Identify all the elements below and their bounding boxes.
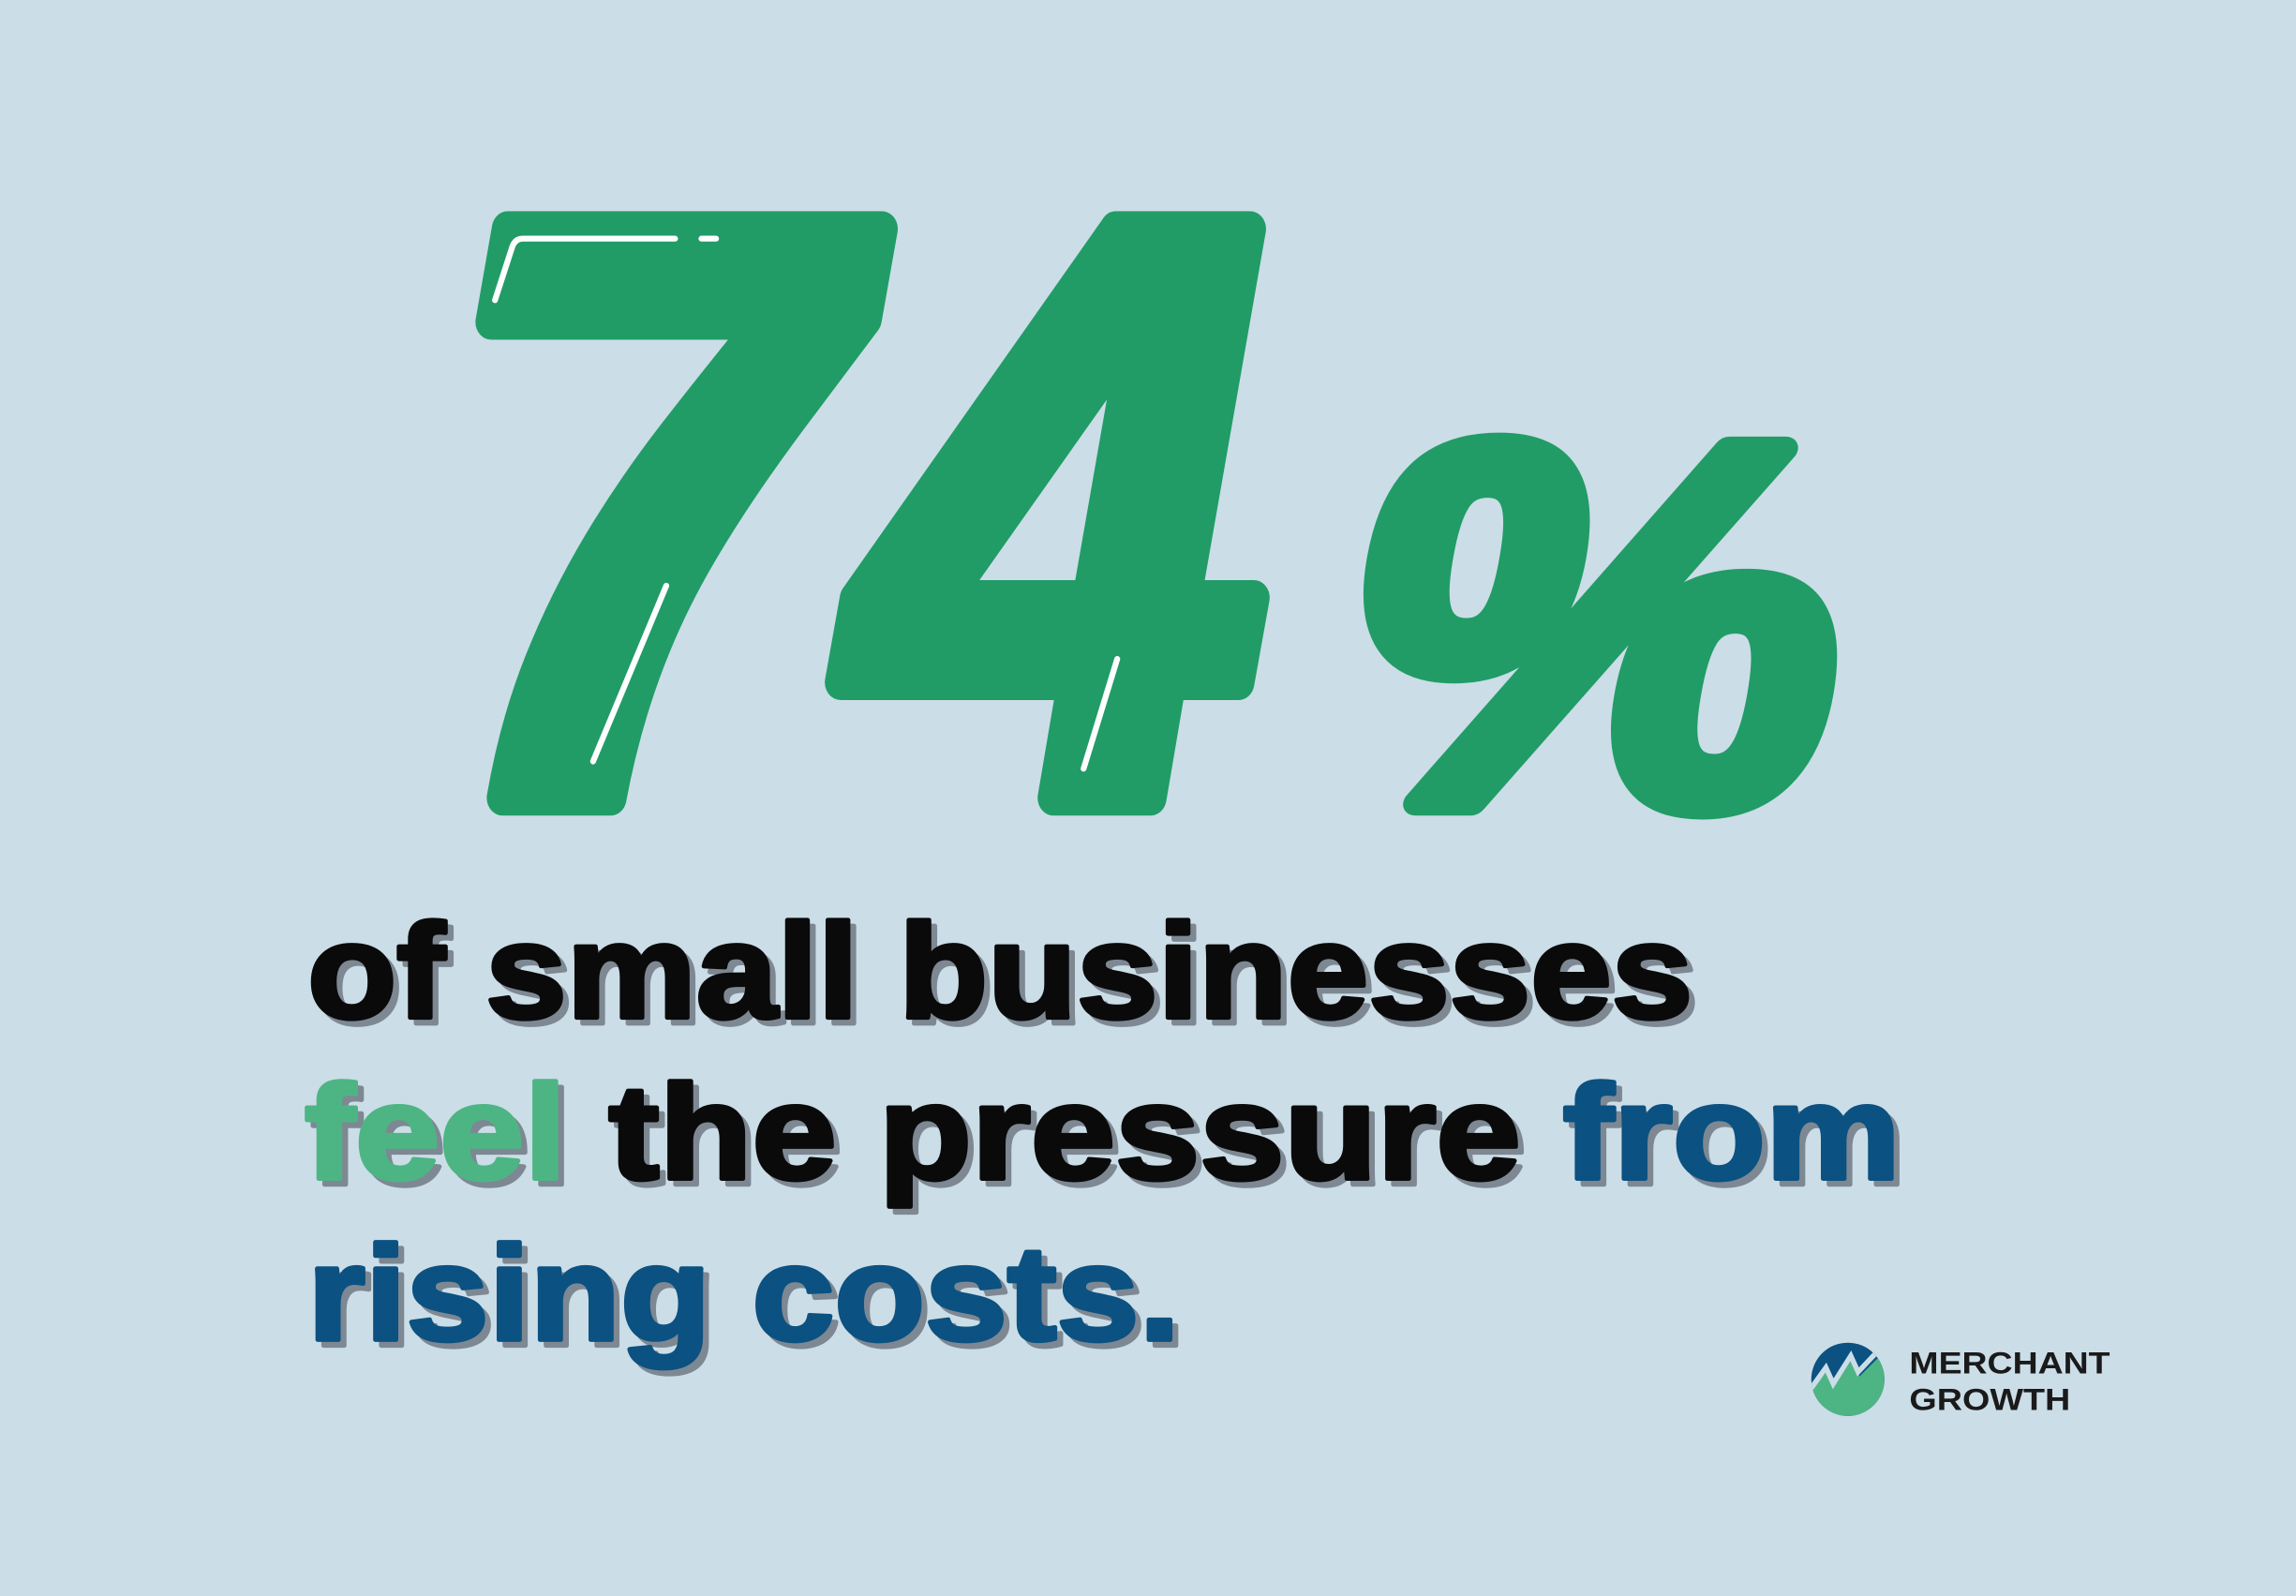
logo wordmark: MERCHANT [1909, 1346, 2110, 1380]
logo wordmark [1909, 1346, 2110, 1417]
line 3: rising costs. [307, 1219, 1180, 1369]
highlight strokes [495, 239, 1117, 768]
logo wordmark: GROWTH [1909, 1382, 2070, 1417]
text shadow: rising costs. [313, 1225, 1186, 1375]
logo icon [1811, 1342, 1885, 1416]
text shadow [310, 902, 1906, 1375]
line 1: of small businesses [307, 897, 1692, 1047]
number 74: 74 [440, 50, 1267, 974]
text shadow: of small businesses [313, 902, 1698, 1052]
percent sign: % [1305, 338, 1897, 911]
statement text [305, 897, 1906, 1375]
logo [1811, 1342, 2110, 1416]
headline number 74% [440, 50, 1897, 974]
text shadow: feel the pressure from [310, 1064, 1906, 1214]
line 2: feel the pressure from [305, 1058, 1901, 1208]
